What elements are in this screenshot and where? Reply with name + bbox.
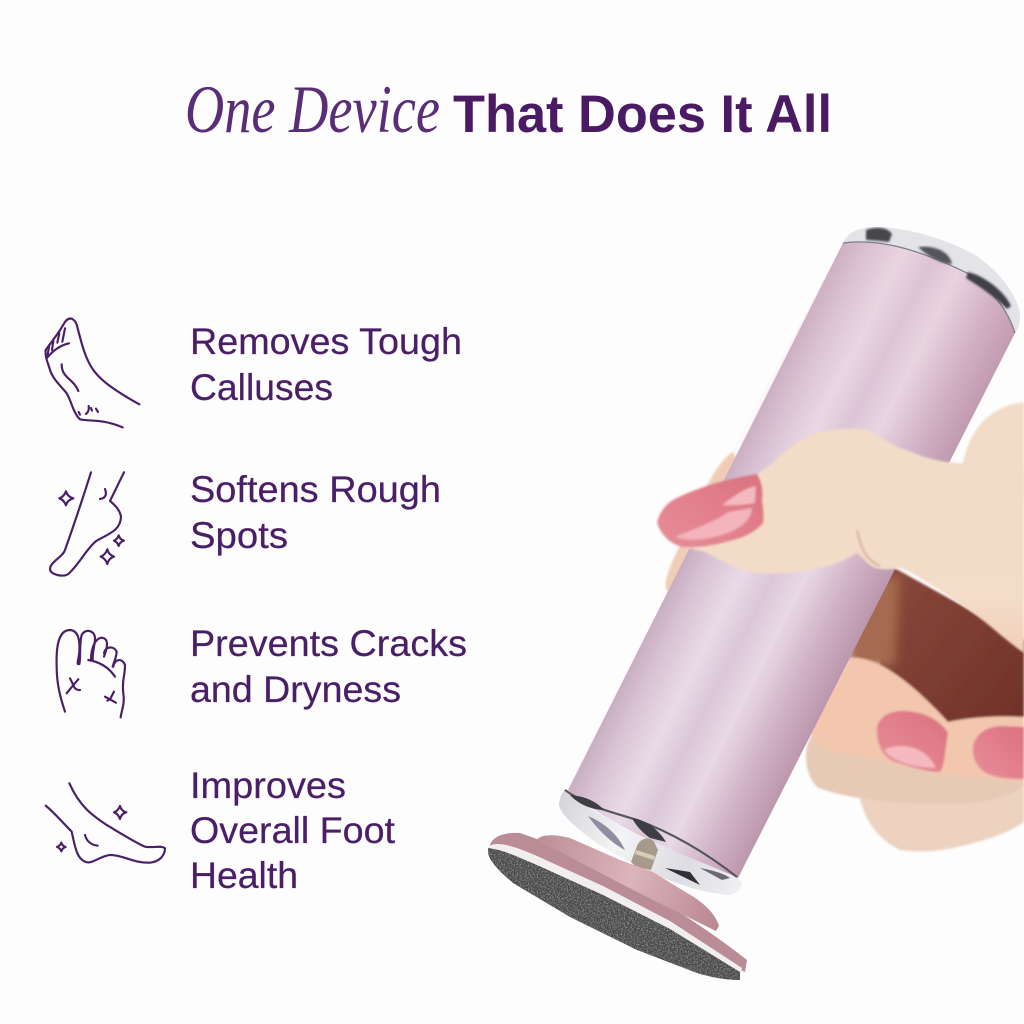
fingertip left of device (666, 452, 760, 592)
text: prevents cracks and dryness: Prevents Cracks (190, 623, 467, 664)
benefit 1: removes tough calluses (46, 319, 462, 427)
lowest finger (857, 775, 1024, 851)
text: improves overall foot health: Overall Foot (190, 810, 396, 851)
text: prevents cracks and dryness: and Dryness (190, 669, 401, 710)
title italic part: One Device (185, 71, 440, 147)
text: improves overall foot health: Improves (190, 765, 346, 806)
disc white backing (487, 844, 742, 980)
sanding disc flange (490, 833, 747, 972)
finger nail highlight (884, 746, 936, 768)
benefit 3: prevents cracks and dryness (57, 623, 467, 717)
text: removes tough calluses: Removes Tough (190, 321, 462, 362)
text: softens rough spots (190, 469, 441, 556)
back of hand (960, 402, 1024, 500)
icon: side foot with sparkles (46, 783, 165, 863)
second finger nail (973, 726, 1024, 779)
icon: foot with sparkles (50, 472, 124, 576)
thumb nail highlight (675, 486, 756, 540)
device pink tint (700, 242, 1015, 600)
text: removes tough calluses: Calluses (190, 367, 333, 408)
text: improves overall foot health (190, 765, 396, 896)
text: removes tough calluses (190, 321, 462, 408)
device cylinder (568, 242, 1015, 878)
product photo: hand holding foot file (487, 227, 1024, 980)
title bold part: That Does It All (453, 85, 832, 144)
palm near device (840, 575, 900, 670)
icon: foot with calluses (46, 319, 139, 427)
finger nail (877, 711, 948, 772)
text: improves overall foot health: Health (190, 855, 298, 896)
thumb (683, 428, 1024, 653)
benefit 2: softens rough spots (50, 469, 441, 576)
benefit 4: improves overall foot health (46, 765, 396, 896)
title (185, 71, 832, 147)
text: softens rough spots: Softens Rough (190, 469, 441, 510)
thumb crease (857, 530, 880, 566)
hand behind device (666, 402, 1024, 851)
middle finger (808, 658, 1024, 781)
device bottom chrome ring (559, 790, 742, 895)
dark palm (880, 560, 1024, 740)
disc grit surface (488, 848, 740, 980)
thumb nail (657, 474, 763, 547)
device top chrome cap (843, 227, 1020, 333)
text: softens rough spots: Spots (190, 515, 288, 556)
text: prevents cracks and dryness (190, 623, 467, 710)
attachment pin (631, 839, 658, 870)
sanding disc upper step (537, 835, 719, 931)
ring finger (806, 735, 1024, 804)
icon: sole with cracks (57, 630, 125, 717)
